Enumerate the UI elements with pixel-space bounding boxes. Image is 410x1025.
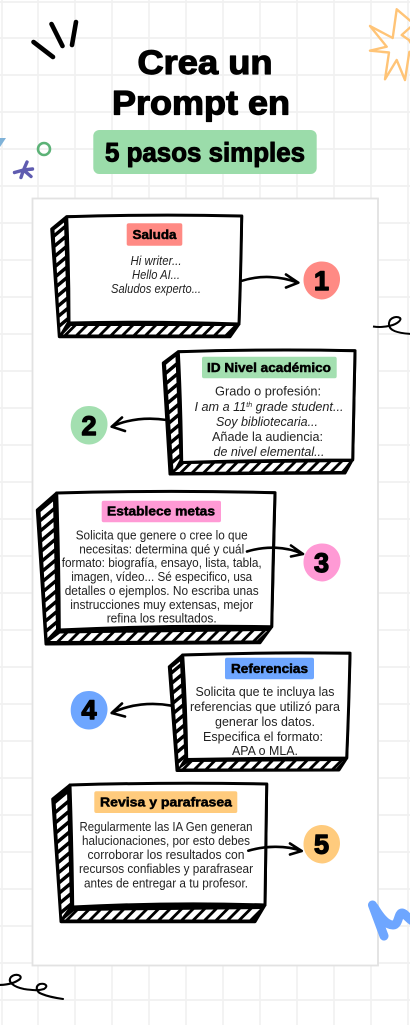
text: academic level: I am a 11	[194, 400, 246, 414]
title: Crea un	[138, 44, 272, 82]
tag: Revisa y parafrasea: Revisa y parafrasea	[100, 796, 233, 810]
badge: 4: 4	[81, 695, 97, 725]
tag: Referencias	[225, 658, 314, 679]
tag: Establece metas	[102, 501, 221, 522]
panel: step 1 Saluda	[52, 215, 242, 337]
text: references	[190, 685, 340, 758]
icon: purple asterisk	[14, 162, 32, 178]
text: review	[79, 820, 253, 890]
text: review: corroborar los resultados con	[88, 848, 244, 862]
text: references: Solicita que te incluya las	[196, 685, 334, 699]
icon: orange outline star	[370, 9, 410, 80]
text: greetings	[111, 254, 201, 296]
text: review: antes de entregar a tu profesor.	[84, 876, 248, 890]
icon: blue triangle	[0, 138, 6, 147]
arrow: to step 1	[242, 274, 298, 288]
icon: green ring	[38, 143, 50, 155]
tag: ID Nivel académico: ID Nivel académico	[207, 361, 331, 375]
text: goals: detalles o ejemplos. No escriba unas	[65, 584, 259, 598]
text: goals: Solicita que genere o cree lo que	[76, 528, 248, 542]
tag: Referencias: Referencias	[231, 662, 308, 676]
text: greetings: Hello AI...	[132, 268, 180, 282]
text: greetings: Hi writer...	[130, 254, 182, 268]
text: goals: instrucciones muy extensas, mejor	[70, 598, 253, 612]
text: references: referencias que utilizó para	[190, 700, 340, 714]
icon: right scribble	[373, 317, 410, 334]
text: goals: formato: biografía, ensayo, lista, tabla,	[62, 556, 262, 570]
text: academic level: th	[246, 402, 252, 409]
badge: 1: 1	[314, 266, 329, 296]
panel: step 2 ID Nivel académico	[163, 350, 355, 474]
badge: 5: 5	[314, 830, 329, 860]
text: review: Regularmente las IA Gen generan	[80, 820, 252, 834]
text: academic level: grade student...	[252, 400, 344, 414]
badge: 3	[303, 543, 341, 582]
text: references: APA o MLA.	[232, 744, 298, 758]
subtitle pill	[93, 130, 317, 174]
badge: 3: 3	[314, 548, 329, 578]
icon: black burst dashes	[34, 22, 76, 57]
badge: 2	[71, 406, 108, 444]
text: references: generar los datos.	[215, 715, 315, 729]
badge: 4	[71, 691, 108, 730]
text: review: recursos confiables y parafrasear	[79, 862, 253, 876]
arrow: to step 4	[112, 704, 172, 716]
text: academic level: Soy bibliotecaria...	[216, 415, 318, 429]
tag: Revisa y parafrasea	[94, 791, 237, 813]
badge: 1	[303, 261, 340, 300]
title	[112, 44, 290, 122]
text: greetings: Saludos experto...	[111, 282, 201, 296]
subtitle pill: 5 pasos simples	[105, 138, 305, 168]
arrow: to step 2	[112, 418, 167, 431]
text: academic level	[194, 385, 344, 459]
text: academic level: Grado o profesión:	[215, 385, 321, 399]
title: Prompt en	[112, 84, 290, 122]
tag: Saluda: Saluda	[132, 228, 178, 242]
text: review: halucionaciones, por esto debes	[82, 834, 250, 848]
panel: step 5 Revisa y parafrasea	[53, 783, 267, 922]
tag: ID Nivel académico	[202, 357, 337, 378]
panel: steps card	[32, 198, 378, 966]
arrow: to step 3	[247, 546, 303, 556]
text: academic level: de nivel elemental...	[214, 445, 324, 459]
icon: blue scribble	[372, 905, 410, 936]
text: goals	[62, 528, 262, 626]
text: goals: necesitas: determina qué y cuál	[79, 542, 244, 556]
badge: 2: 2	[81, 411, 97, 441]
tag: Saluda	[127, 223, 182, 246]
panel: step 4 Referencias	[169, 653, 350, 770]
text: goals: imagen, vídeo... Sé especifico, usa	[71, 570, 252, 584]
badge: 5	[303, 825, 340, 864]
text: references: Especifica el formato:	[203, 730, 323, 744]
arrow: to step 5	[248, 844, 302, 854]
text: goals: refina los resultados.	[107, 612, 217, 626]
tag: Establece metas: Establece metas	[107, 505, 215, 519]
icon: bottom scribble	[0, 975, 63, 999]
text: academic level: Añade la audiencia:	[212, 430, 323, 444]
panel: step 3 Establece metas	[37, 491, 275, 644]
